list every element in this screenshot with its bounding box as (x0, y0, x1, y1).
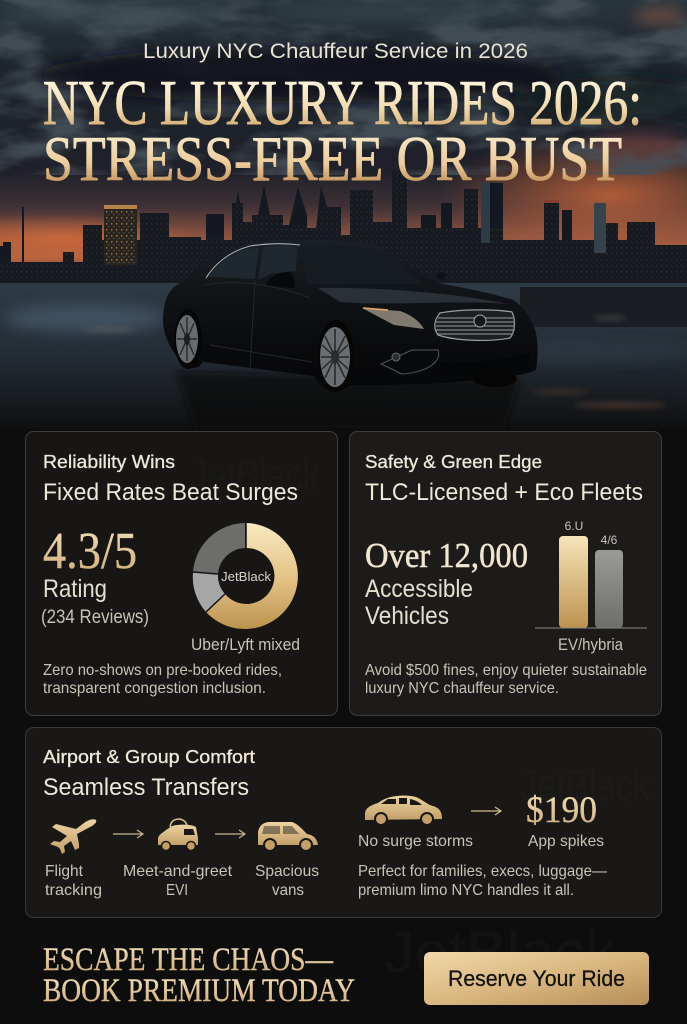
call to action headline: BOOK PREMIUM TODAY (43, 973, 355, 1009)
review count: (234 Reviews) (41, 607, 149, 628)
bar chart (535, 519, 647, 628)
panel description: Avoid $500 fines, enjoy quieter sustainable (365, 662, 647, 679)
windshield (300, 246, 422, 284)
panel heading: Safety & Green Edge (365, 451, 542, 472)
label: meet-and-greet (123, 863, 233, 899)
label: meet-and-greet: EVI (166, 882, 188, 899)
panel: reliability wins (26, 432, 338, 716)
panel heading: Airport & Group Comfort (43, 746, 255, 767)
sunset sky (0, 0, 687, 285)
button: reserve your ride (424, 952, 649, 1005)
rating value: 4.3/5 (43, 523, 137, 580)
vehicle label: Vehicles (365, 602, 449, 630)
label: spacious vans (255, 863, 319, 899)
panel heading: Reliability Wins (43, 451, 175, 472)
call to action headline: ESCAPE THE CHAOS— (43, 942, 334, 978)
donut chart (193, 523, 298, 629)
side windows (208, 246, 297, 280)
vehicle label: Accessible (365, 575, 473, 603)
city skyline (0, 170, 687, 285)
arrow (113, 830, 143, 838)
far mirror (436, 272, 446, 280)
label: flight tracking: Flight (45, 863, 84, 880)
panel description: transparent congestion inclusion. (43, 680, 266, 697)
bar chart: 4/6 (601, 533, 618, 547)
icon: car with open door (158, 819, 198, 850)
car reflection (176, 372, 520, 428)
icon: plane (50, 819, 96, 854)
label: spacious vans: vans (272, 882, 304, 899)
front wheel (318, 320, 354, 392)
car body (163, 239, 538, 392)
vehicle label (365, 575, 473, 630)
panel subheading: Seamless Transfers (43, 774, 249, 801)
car roof chrome line (206, 244, 300, 278)
watermark: JetBlack (384, 920, 617, 985)
label: spacious vans: Spacious (255, 863, 319, 880)
price: $190 (526, 790, 597, 831)
donut caption: Uber/Lyft mixed (191, 636, 300, 654)
arrow (471, 807, 501, 815)
bar chart caption: EV/hybria (558, 636, 624, 654)
label: meet-and-greet: Meet-and-greet (123, 863, 233, 880)
panel description: Perfect for families, execs, luggage— (358, 863, 607, 880)
vehicle count: Over 12,000 (365, 536, 528, 575)
panel: safety and green edge (350, 432, 662, 716)
rear wheel (174, 309, 202, 369)
hood sheen (318, 288, 508, 304)
label: app spikes: App spikes (528, 833, 604, 850)
far front wheel (473, 371, 517, 387)
panel description: Zero no-shows on pre-booked rides, (43, 662, 282, 679)
headlight (362, 308, 424, 329)
dark lower section background (0, 429, 687, 1024)
label: flight tracking: tracking (45, 882, 102, 899)
main title (43, 67, 642, 194)
panel subheading: Fixed Rates Beat Surges (43, 479, 298, 506)
label: flight tracking (45, 863, 102, 899)
panel description: premium limo NYC handles it all. (358, 882, 574, 899)
wet road (0, 278, 687, 431)
panel description (358, 863, 607, 899)
bar chart: 6.U (565, 519, 583, 533)
arrow (215, 830, 245, 838)
front bumper intake (381, 350, 439, 374)
rating label: Rating (43, 575, 107, 603)
icon: sedan (365, 795, 442, 825)
side mirror (266, 272, 294, 288)
label: no surge storms: No surge storms (358, 833, 473, 850)
panel description: luxury NYC chauffeur service. (365, 680, 559, 697)
panel description (365, 662, 647, 697)
icon: van (258, 822, 318, 851)
door lines (205, 280, 312, 370)
grille (435, 310, 515, 340)
donut chart: JetBlack (221, 570, 272, 584)
hero scene: night sky, skyline and wet road (0, 0, 687, 431)
panel subheading: TLC-Licensed + Eco Fleets (365, 479, 643, 506)
call to action headline (43, 942, 355, 1009)
black luxury sedan (163, 239, 538, 428)
button: reserve your ride: Reserve Your Ride (448, 966, 625, 991)
panel: airport and group comfort (26, 728, 662, 918)
panel description (43, 662, 282, 697)
subtitle: Luxury NYC Chauffeur Service in 2026 (143, 39, 528, 63)
